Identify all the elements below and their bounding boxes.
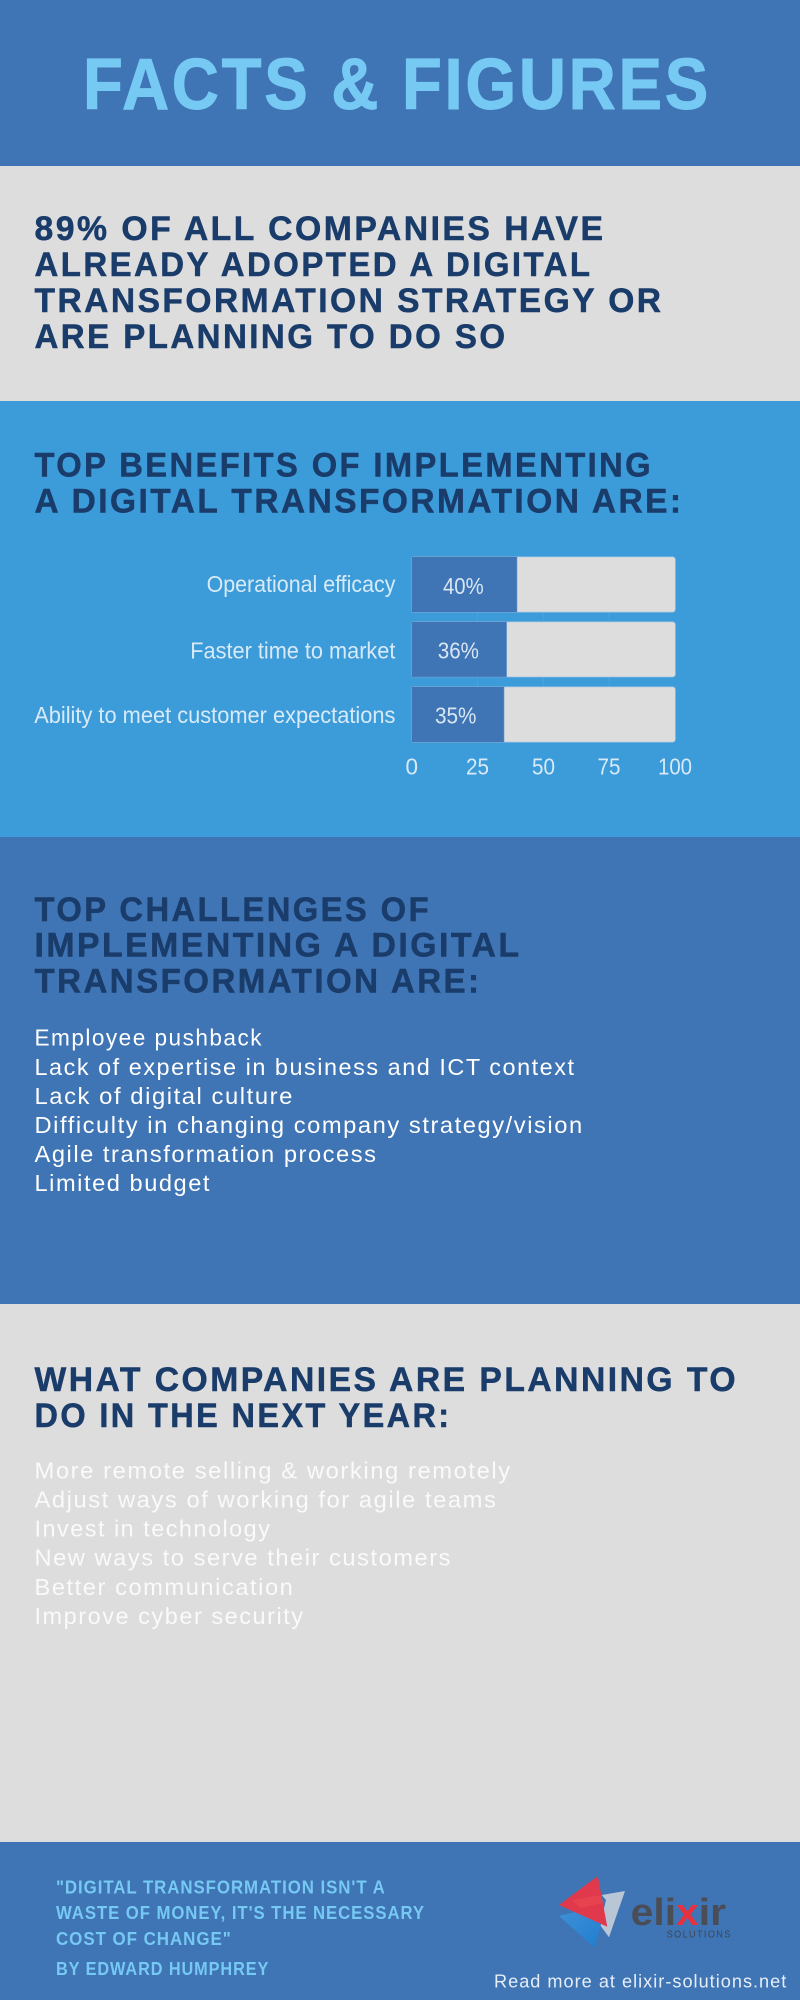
heading: top challenges: TOP CHALLENGES OF [34, 891, 431, 929]
heading: top challenges: TRANSFORMATION ARE: [34, 963, 482, 1001]
quote: BY EDWARD HUMPHREY [56, 1959, 269, 1979]
chart axis labels: 75 [598, 753, 620, 779]
bar chart: benefits [34, 557, 692, 779]
quote [56, 1877, 425, 1979]
bar: operational efficacy: 40% [443, 573, 484, 599]
heading: top benefits: TOP BENEFITS OF IMPLEMENTING [34, 447, 653, 485]
bar: faster time to market: 36% [438, 637, 479, 663]
icon: elixir logo [559, 1876, 732, 1947]
panel: top challenges [0, 837, 800, 1304]
title: FACTS & FIGURES [83, 45, 711, 125]
heading: next year plans: WHAT COMPANIES ARE PLANNING TO [34, 1361, 738, 1399]
list: challenges: Lack of digital culture [34, 1083, 294, 1109]
list: challenges [34, 1025, 584, 1196]
list: challenges: Agile transformation process [34, 1141, 378, 1167]
list: plans: Invest in technology [34, 1516, 271, 1542]
chart axis labels: 25 [466, 753, 489, 779]
quote: "DIGITAL TRANSFORMATION ISN'T A [56, 1877, 386, 1897]
list: plans: Adjust ways of working for agile teams [34, 1487, 497, 1513]
heading: 89% statistic: ARE PLANNING TO DO SO [34, 318, 508, 356]
heading: next year plans [34, 1361, 738, 1435]
list: challenges: Limited budget [34, 1170, 211, 1196]
panel: top benefits [0, 401, 800, 837]
panel: title banner [0, 0, 800, 166]
list: plans: More remote selling & working remotely [34, 1457, 512, 1483]
panel: footer [0, 1842, 800, 2000]
chart axis labels: 100 [658, 753, 692, 779]
quote: WASTE OF MONEY, IT'S THE NECESSARY [56, 1903, 425, 1923]
bar: customer expectations: Ability to meet customer expectations [34, 702, 395, 728]
heading: 89% statistic [34, 210, 664, 356]
list: challenges: Difficulty in changing company strategy/vision [34, 1112, 584, 1138]
heading: next year plans: DO IN THE NEXT YEAR: [34, 1397, 452, 1435]
icon: elixir logo: SOLUTIONS [667, 1929, 732, 1940]
heading: 89% statistic: ALREADY ADOPTED A DIGITAL [34, 246, 592, 284]
bar: faster time to market: Faster time to market [190, 637, 396, 663]
chart axis labels [406, 753, 692, 779]
heading: top challenges [34, 891, 522, 1001]
bar: operational efficacy: Operational efficacy [207, 571, 396, 597]
heading: 89% statistic: TRANSFORMATION STRATEGY OR [34, 282, 664, 320]
list: challenges: Employee pushback [34, 1025, 263, 1051]
quote: COST OF CHANGE" [56, 1929, 232, 1949]
icon: elixir logo: elixir [631, 1892, 726, 1934]
list: plans: Improve cyber security [34, 1603, 305, 1629]
read more link text: Read more at elixir-solutions.net [494, 1972, 787, 1992]
heading: 89% statistic: 89% OF ALL COMPANIES HAVE [34, 210, 606, 248]
chart axis labels: 50 [532, 753, 555, 779]
bar: faster time to market [190, 622, 676, 677]
list: plans: New ways to serve their customers [34, 1545, 452, 1571]
panel: headline statistic [0, 166, 800, 401]
list: plans [34, 1457, 512, 1629]
panel: next year plans [0, 1304, 800, 1842]
chart axis labels: 0 [406, 753, 418, 779]
list: plans: Better communication [34, 1574, 294, 1600]
bar: customer expectations: 35% [435, 702, 476, 728]
list: challenges: Lack of expertise in business and ICT context [34, 1054, 576, 1080]
bar: customer expectations [34, 687, 675, 742]
bar: operational efficacy [207, 557, 676, 612]
heading: top benefits: A DIGITAL TRANSFORMATION ARE: [34, 483, 684, 521]
heading: top challenges: IMPLEMENTING A DIGITAL [34, 927, 522, 965]
heading: top benefits [34, 447, 684, 521]
